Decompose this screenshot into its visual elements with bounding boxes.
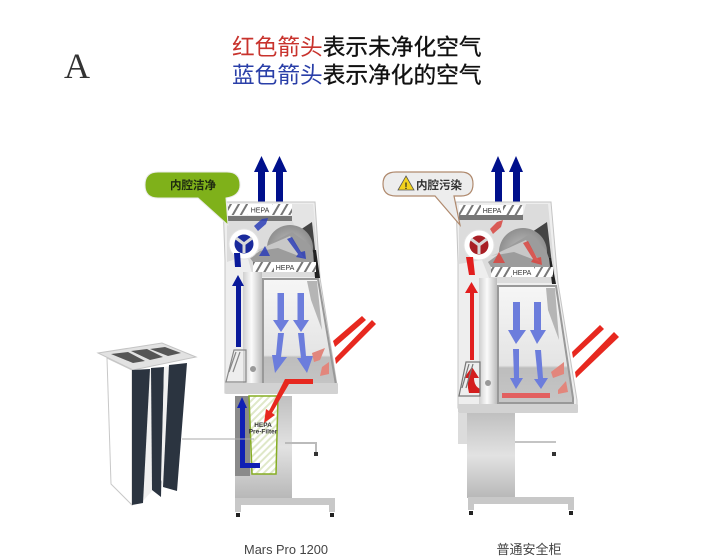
chamber downward arrows [508,302,548,389]
callout: clean chamber [145,172,240,225]
right cabinet: standard safety cabinet [456,156,619,515]
internal blue arrows [254,218,306,259]
upper HEPA [228,204,292,215]
worktop [225,383,338,394]
chamber window [263,279,336,391]
red arrow into pre-filter [264,379,313,423]
title: 红色箭头表示未净化空气 [232,34,482,60]
icon: warning triangle: ! [404,181,408,191]
callout: contaminated chamber [383,172,473,225]
cabinet body [223,202,337,393]
callout: clean chamber: 内腔洁净 [170,178,216,192]
leg [467,413,515,498]
connector line [182,438,254,440]
lower HEPA: HEPA [513,270,532,277]
chamber window [498,286,573,403]
pre-filter [249,396,278,474]
blue return duct arrow [232,253,244,347]
inflow red arrows [333,316,376,364]
title: 蓝色箭头表示净化的空气 [232,62,482,88]
red tray arrow [464,367,480,393]
faded inflow arrows [551,362,568,394]
red duct arrows [465,257,478,360]
blower compartment [227,204,319,277]
chamber downward arrows [272,293,313,373]
exhaust arrows [254,156,287,202]
drain tray [459,362,480,396]
lower HEPA [491,267,553,277]
pre-filter: Pre-Filter [249,428,278,436]
upper HEPA [459,205,523,215]
callout: contaminated chamber: 内腔污染 [416,178,462,192]
red floor bar [502,393,550,398]
worktop [458,404,578,413]
base and feet [235,498,335,517]
inflow red arrows [572,325,619,378]
label: standard safety cabinet: 普通安全柜 [496,542,562,557]
pre-filter: HEPA [254,422,272,429]
lower HEPA: HEPA [276,265,295,272]
blower compartment [459,204,556,283]
upper HEPA: HEPA [251,208,270,214]
shelf bar [515,441,556,443]
service tube [479,278,497,406]
fan [464,230,494,260]
title [232,34,482,88]
exhaust arrows [491,156,523,202]
base and feet [468,497,574,515]
drain tray [226,350,246,382]
internal red arrows [490,220,542,265]
shelf bar [285,443,316,452]
left cabinet: Mars Pro 1200 [182,156,376,517]
letter A: A [64,46,90,86]
faded inflow arrows [312,348,329,376]
cabinet body [456,202,577,408]
fan [229,229,259,259]
service tube [243,272,262,390]
blue arrow under worktop [237,397,260,468]
lower HEPA [253,262,316,272]
label: Mars Pro 1200: Mars Pro 1200 [244,542,328,557]
upper HEPA: HEPA [483,208,502,215]
leg [235,396,292,498]
HEPA filter cartridge [98,343,196,505]
